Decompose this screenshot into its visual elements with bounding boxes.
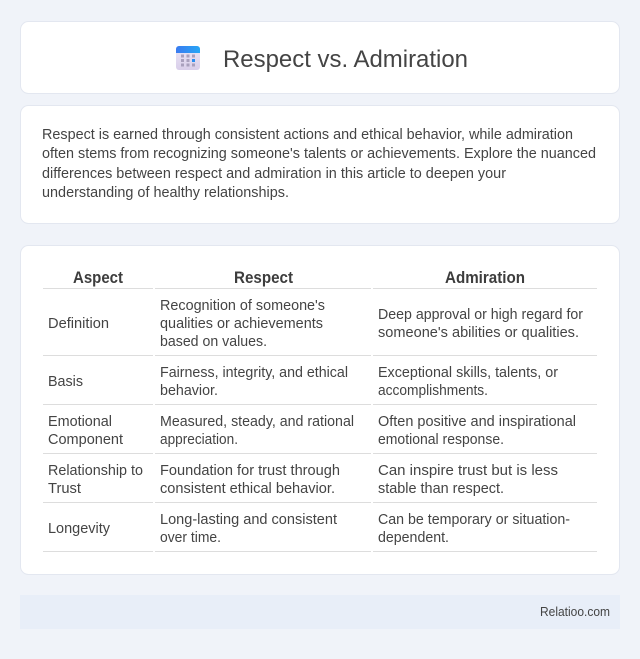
row: emotional component: emotional response. xyxy=(378,432,504,448)
row: basis: accomplishments. xyxy=(378,383,488,399)
row: longevity: dependent. xyxy=(378,530,449,546)
text block: introduction: often stems from recognizing someone's talents or achievements. Explore the nuanced xyxy=(42,146,596,162)
table header row xyxy=(73,269,525,287)
title: Respect vs. Admiration xyxy=(223,46,468,73)
row: longevity: over time. xyxy=(160,530,221,546)
row: longevity xyxy=(48,512,570,546)
row: definition: qualities or achievements xyxy=(160,316,323,332)
row: emotional component: Often positive and inspirational xyxy=(378,414,576,430)
row: definition: Definition xyxy=(48,316,109,332)
row: longevity: Can be temporary or situation- xyxy=(378,512,570,528)
row: basis xyxy=(48,365,558,399)
row: definition: someone's abilities or qualities. xyxy=(378,325,579,341)
table header row: Respect xyxy=(234,269,293,287)
row: relationship to trust: Foundation for trust through xyxy=(160,463,340,479)
panel: introduction xyxy=(20,106,620,224)
row: basis: Fairness, integrity, and ethical xyxy=(160,365,348,381)
row: relationship to trust: Trust xyxy=(48,481,81,497)
row: emotional component: Component xyxy=(48,432,123,448)
row: relationship to trust xyxy=(48,463,558,497)
row: longevity: Longevity xyxy=(48,521,111,537)
table header row: Aspect xyxy=(73,269,123,287)
row: definition xyxy=(48,298,583,350)
text block: introduction: understanding of healthy relationships. xyxy=(42,185,289,201)
text block: introduction: differences between respect and admiration in this article to deepen your xyxy=(42,166,506,182)
row: basis: Basis xyxy=(48,374,83,390)
row: emotional component xyxy=(48,414,576,448)
row: relationship to trust: Relationship to xyxy=(48,463,143,479)
footer credit: Relatioo.com xyxy=(540,605,610,619)
row: emotional component: Measured, steady, and rational xyxy=(160,414,354,430)
panel: comparison table xyxy=(20,246,620,574)
row: emotional component: appreciation. xyxy=(160,432,238,448)
row: basis: Exceptional skills, talents, or xyxy=(378,365,558,381)
row: longevity: Long-lasting and consistent xyxy=(160,512,337,528)
icon: calendar xyxy=(176,46,200,70)
panel: title header xyxy=(20,22,620,94)
text block: introduction xyxy=(42,127,596,201)
row: relationship to trust: Can inspire trust but is less xyxy=(378,463,558,479)
table header row: Admiration xyxy=(445,269,525,287)
row: basis: behavior. xyxy=(160,383,218,399)
row: definition: Recognition of someone's xyxy=(160,298,325,314)
footer xyxy=(20,595,620,629)
row: relationship to trust: consistent ethical behavior. xyxy=(160,481,335,497)
row: relationship to trust: stable than respect. xyxy=(378,481,504,497)
row: definition: based on values. xyxy=(160,334,267,350)
row: emotional component: Emotional xyxy=(48,414,112,430)
text block: introduction: Respect is earned through consistent actions and ethical behavior, while admiration xyxy=(42,127,573,143)
row: definition: Deep approval or high regard for xyxy=(378,307,583,323)
